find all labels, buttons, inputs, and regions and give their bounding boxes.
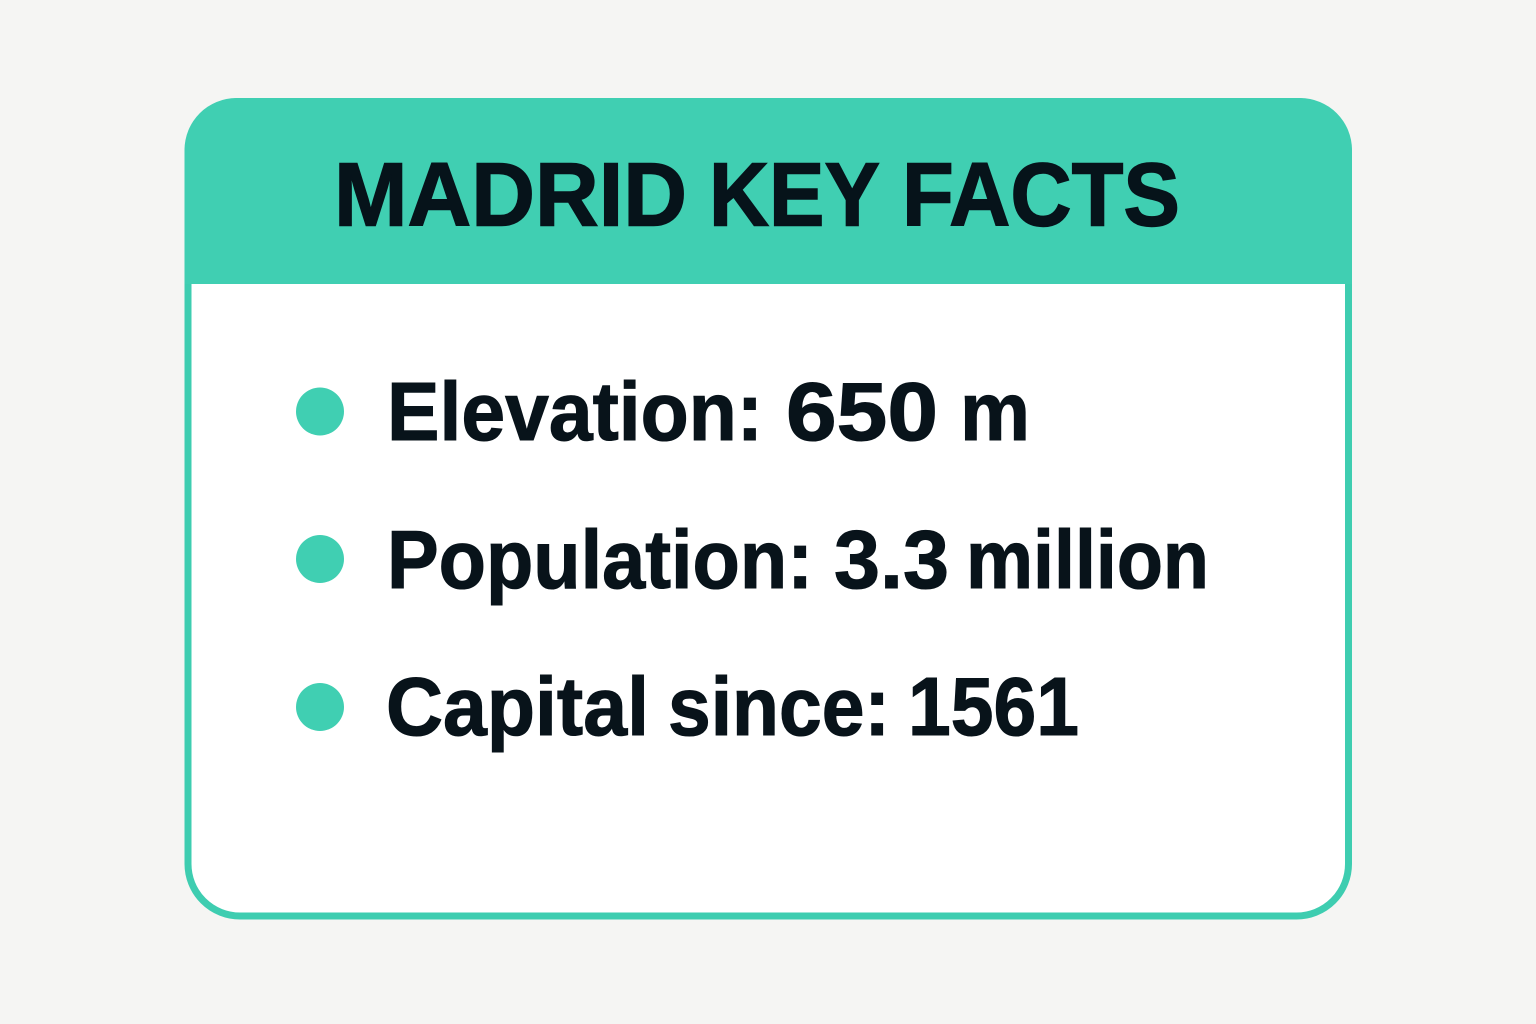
text: capital: Capital (386, 660, 649, 753)
bullet: population (296, 535, 344, 583)
header band (184, 98, 1352, 284)
text: population: million (966, 513, 1209, 606)
text: population (387, 513, 1209, 606)
text: capital (386, 660, 1079, 753)
title: FACTS (902, 146, 1180, 246)
title (334, 146, 1180, 246)
text: elevation: m (960, 365, 1030, 458)
title: MADRID (334, 146, 687, 246)
bullet: elevation (296, 388, 344, 436)
bullet: capital (296, 683, 344, 731)
text: population: Population: (387, 513, 813, 606)
text: capital: since: (668, 660, 890, 753)
text: elevation: Elevation: (387, 365, 763, 458)
text: elevation: 650 (786, 365, 938, 458)
text: elevation (387, 365, 1030, 458)
panel: key facts card (184, 98, 1352, 916)
card body with border (188, 102, 1348, 916)
title: KEY (709, 146, 880, 246)
text: population: 3.3 (834, 513, 949, 606)
text: capital: 1561 (908, 660, 1079, 753)
